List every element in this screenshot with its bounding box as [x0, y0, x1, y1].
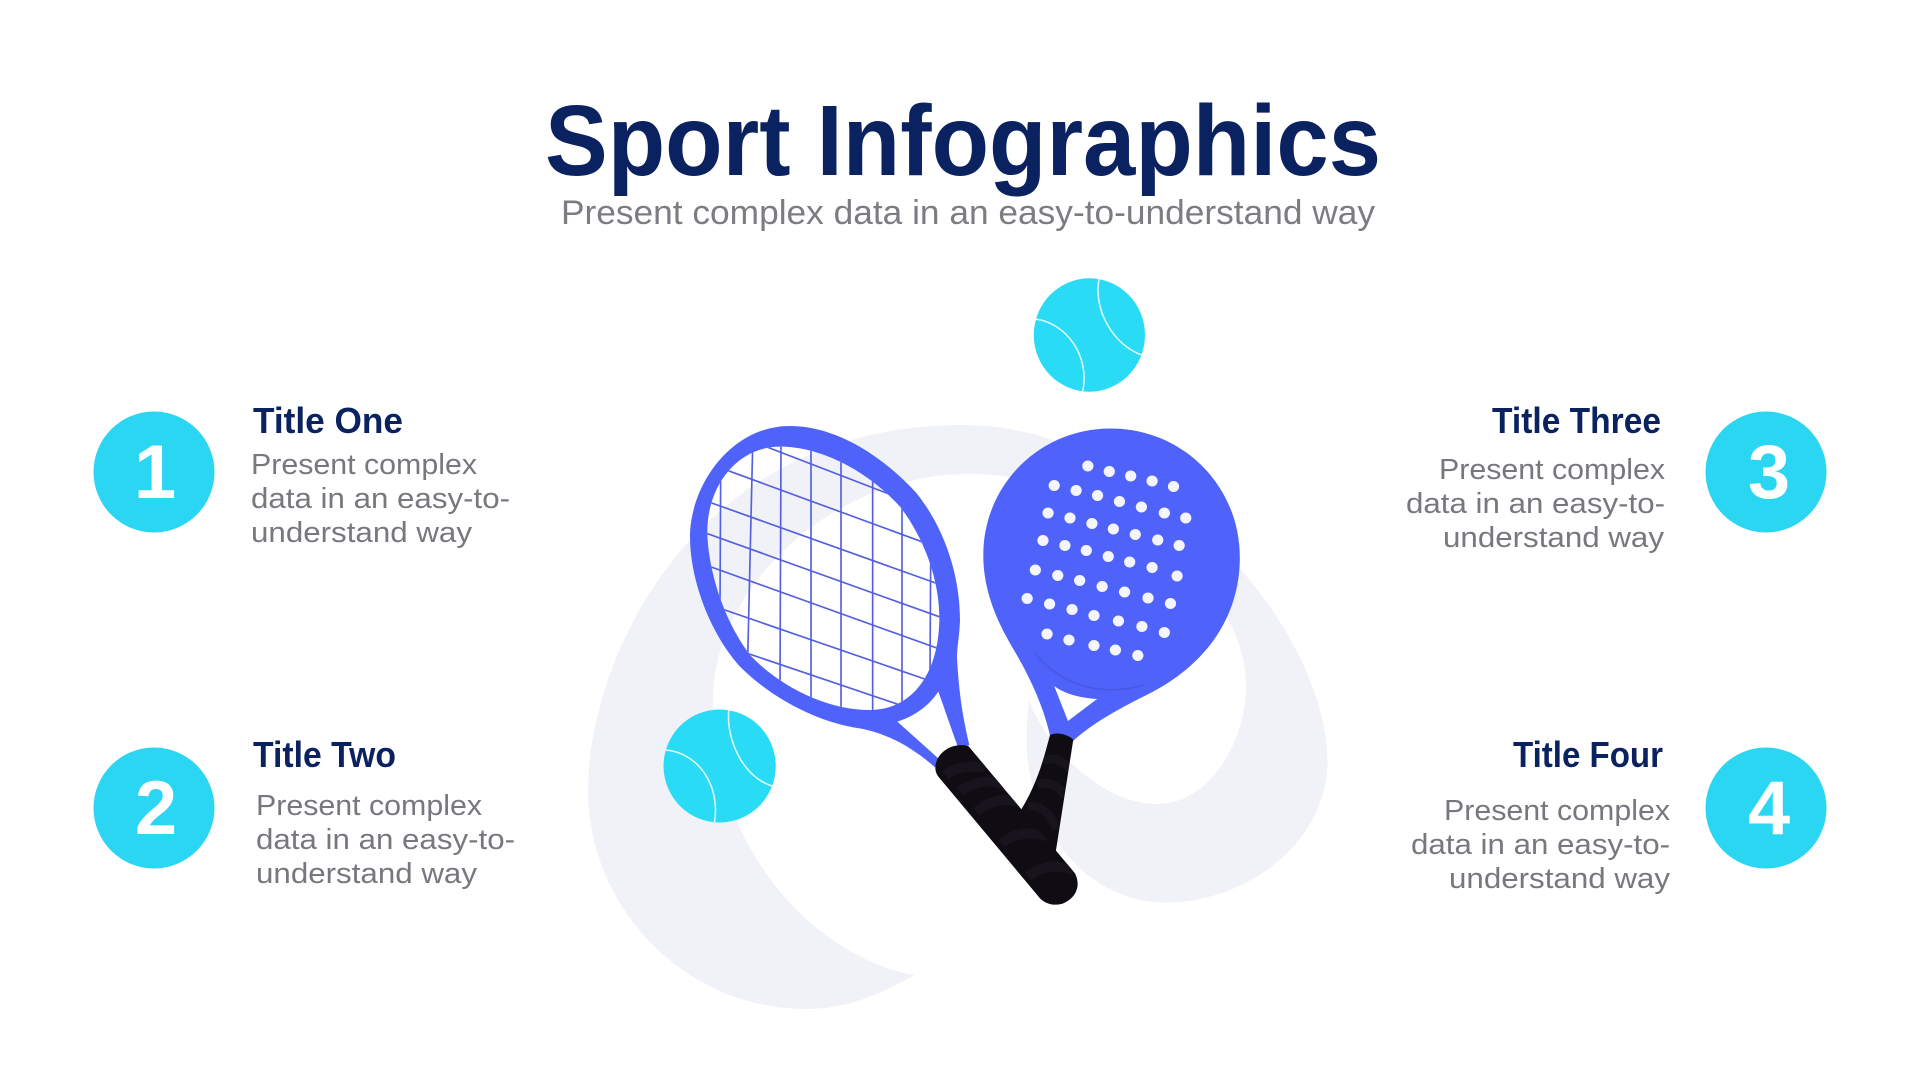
- paddle handle: [1021, 734, 1074, 851]
- racket frame: [690, 426, 969, 767]
- text block 3: understand way: [1443, 522, 1665, 554]
- heading: Title Three: Title Three: [1492, 400, 1661, 441]
- badge 1: 1: [134, 430, 176, 515]
- icon: lower tennis ball: [664, 710, 776, 822]
- icon: padel paddle: [983, 428, 1240, 741]
- background swirl: [588, 425, 1328, 1009]
- text block 3: [1406, 454, 1666, 554]
- heading: Title Four: Title Four: [1513, 734, 1663, 775]
- text block 1: data in an easy-to-: [251, 483, 510, 515]
- item 1: [94, 400, 510, 549]
- text block 1: [251, 449, 510, 549]
- racket handle: [935, 745, 1078, 905]
- text block 2: [256, 790, 515, 890]
- text block 2: Present complex: [256, 790, 483, 822]
- item 3: [1406, 400, 1826, 554]
- badge 3: 3: [1748, 430, 1790, 515]
- racket strings: [707, 446, 940, 710]
- badge 4: [1706, 748, 1826, 868]
- paddle holes: [1022, 460, 1191, 661]
- text block 2: understand way: [256, 858, 478, 890]
- badge 4: 4: [1748, 766, 1790, 851]
- text block 4: understand way: [1449, 863, 1671, 895]
- text block 2: data in an easy-to-: [256, 824, 515, 856]
- text block 3: data in an easy-to-: [1406, 488, 1665, 520]
- icon: top tennis ball: [1034, 278, 1145, 392]
- badge 2: 2: [135, 766, 177, 851]
- central illustration: [588, 278, 1328, 1009]
- badge 3: [1706, 412, 1826, 532]
- heading: Title Two: Title Two: [253, 734, 396, 775]
- badge 2: [94, 748, 214, 868]
- item 2: [94, 734, 515, 890]
- text block 3: Present complex: [1439, 454, 1666, 486]
- text block 1: Present complex: [251, 449, 478, 481]
- paddle head: [983, 428, 1240, 741]
- text block 4: [1411, 795, 1671, 895]
- icon: tennis racket: [690, 426, 969, 767]
- text block 4: Present complex: [1444, 795, 1671, 827]
- badge 1: [94, 412, 214, 532]
- text block 1: understand way: [251, 517, 473, 549]
- subtitle: Present complex data in an easy-to-understand way: [561, 194, 1375, 232]
- title: Sport Infographics: [545, 85, 1381, 197]
- heading: Title One: Title One: [253, 400, 403, 441]
- text block 4: data in an easy-to-: [1411, 829, 1670, 861]
- icon: grip handles: [935, 733, 1078, 905]
- item 4: [1411, 734, 1826, 895]
